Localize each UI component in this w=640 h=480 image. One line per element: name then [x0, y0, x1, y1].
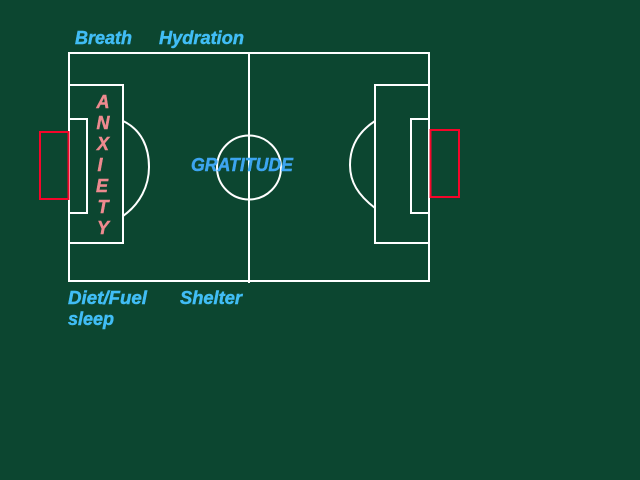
- centre circle: [217, 136, 281, 200]
- label: Diet/Fuel: Diet/Fuel: [68, 288, 148, 308]
- label: ANXIETY (vertical): [96, 92, 111, 238]
- halfway line: [248, 53, 250, 283]
- left penalty arc: [123, 121, 149, 216]
- label: ANXIETY (vertical): X: [96, 134, 110, 154]
- pitch outline: [69, 53, 429, 281]
- label: GRATITUDE: GRATITUDE: [191, 155, 294, 175]
- left penalty area: [69, 85, 123, 243]
- label: ANXIETY (vertical): Y: [97, 218, 111, 238]
- right goal: [430, 130, 459, 197]
- label: ANXIETY (vertical): E: [96, 176, 109, 196]
- label: sleep: sleep: [68, 309, 114, 329]
- left goal area: [69, 119, 87, 213]
- label: Shelter: Shelter: [180, 288, 243, 308]
- label: ANXIETY (vertical): A: [96, 92, 110, 112]
- label: Breath: Breath: [75, 28, 132, 48]
- right penalty area: [375, 85, 429, 243]
- right goal area: [411, 119, 429, 213]
- label: Hydration: Hydration: [159, 28, 244, 48]
- label: ANXIETY (vertical): T: [98, 197, 110, 217]
- pitch markings: [69, 53, 429, 283]
- left goal: [40, 132, 68, 199]
- label: ANXIETY (vertical): I: [97, 155, 103, 175]
- right penalty arc: [350, 121, 375, 208]
- label: ANXIETY (vertical): N: [96, 113, 110, 133]
